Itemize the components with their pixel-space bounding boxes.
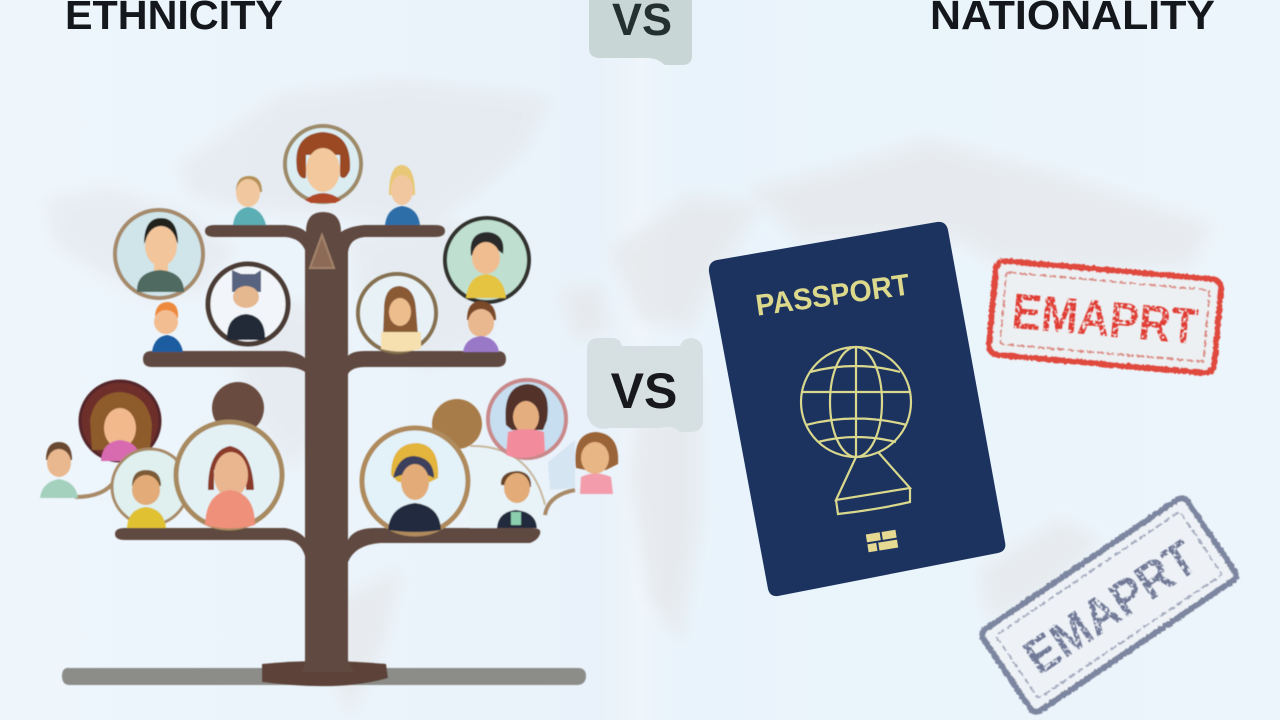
portrait: red circle woman bbox=[80, 381, 160, 461]
trunk top emblem bbox=[310, 235, 334, 268]
passport bbox=[709, 222, 1005, 596]
portrait: pink woman in circle bbox=[488, 380, 566, 458]
small twigs bbox=[75, 480, 575, 515]
person: blonde woman bbox=[385, 165, 420, 225]
portrait: left man bbox=[115, 210, 203, 298]
portrait: mid right woman bbox=[358, 274, 436, 352]
badge: top VS bbox=[589, 0, 692, 65]
passport label: PASSPORT bbox=[754, 268, 912, 323]
person: far right woman bbox=[575, 432, 618, 494]
world map: left faint bbox=[45, 80, 550, 470]
lower right arc with man bbox=[470, 440, 575, 528]
decorative brown circles bbox=[212, 382, 264, 434]
ground bar bbox=[62, 668, 586, 685]
person: teal shirt man bbox=[233, 176, 266, 225]
family tree bbox=[40, 126, 618, 686]
portrait: large left woman bbox=[176, 422, 282, 528]
portrait: large right woman bbox=[362, 428, 468, 534]
stamp: red: EMAPRT bbox=[1010, 283, 1200, 355]
portrait: mid left person with cap bbox=[208, 264, 288, 344]
world map: right faint bbox=[335, 140, 1210, 715]
stamp: red bbox=[988, 260, 1222, 374]
tree trunk and branches bbox=[115, 212, 540, 672]
stamp: blue bbox=[980, 496, 1238, 714]
badge: middle VS bbox=[587, 338, 703, 432]
stamp: blue: EMAPRT bbox=[1014, 529, 1208, 686]
person: purple shirt bbox=[463, 301, 499, 352]
tree base bbox=[262, 661, 388, 686]
portrait: right man bbox=[445, 218, 529, 302]
person: orange cap boy bbox=[152, 302, 183, 352]
portrait: lower left man bbox=[112, 449, 188, 528]
person: far left man bbox=[40, 442, 78, 498]
icon: globe on stand bbox=[801, 347, 911, 514]
passport cover bbox=[709, 222, 1005, 596]
icon: chip bbox=[866, 530, 898, 552]
badge: middle VS: VS bbox=[611, 363, 677, 419]
portrait: top woman bbox=[285, 126, 361, 203]
